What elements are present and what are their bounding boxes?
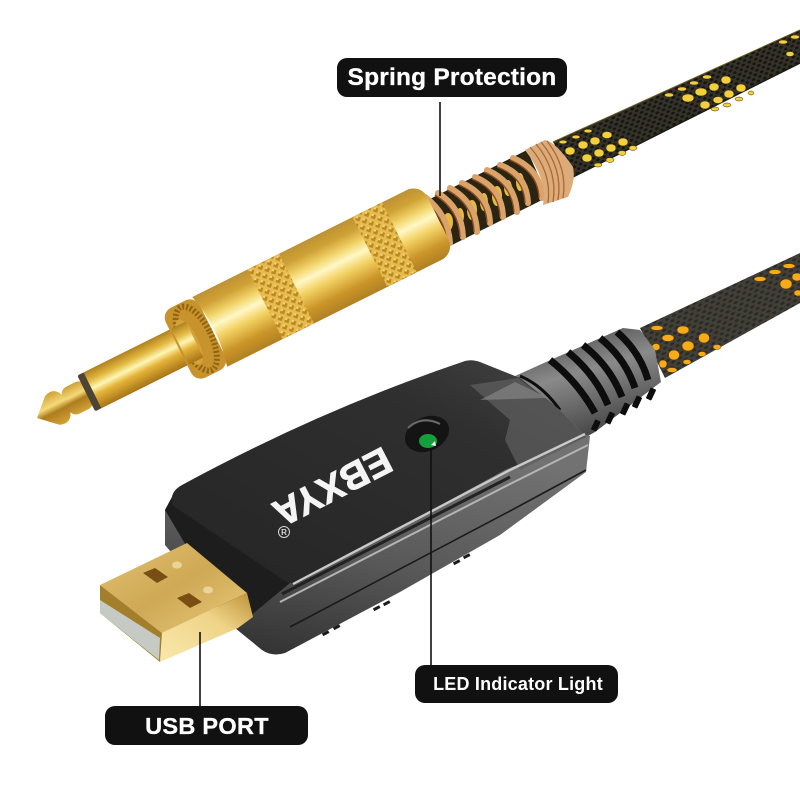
plug opening [100,585,162,662]
callout: LED indicator light [415,450,618,703]
gold jack plug [20,183,455,453]
callout: USB port [105,632,308,745]
knurled bands [248,202,417,339]
callout: spring protection [337,58,567,196]
white insert [100,600,160,660]
plug barrel [192,183,455,367]
spring protection coils [422,140,574,245]
registered mark [278,526,290,538]
callout: spring protection: Spring Protection [348,64,556,91]
registered mark: R [281,528,287,537]
USB connector body [165,360,590,654]
LED indicator [399,409,455,459]
body top face [172,360,586,583]
plug top shell [100,543,247,633]
callout: LED indicator light: LED Indicator Light [433,674,603,694]
lower braided cable [640,253,800,378]
spring end cap [525,140,574,205]
plug side shell [160,593,253,662]
USB metal plug [100,543,253,662]
plug holes [143,568,202,608]
strain relief boot [515,328,661,437]
insulating ring [77,372,102,411]
upper braided cable [553,30,800,177]
body grooves [280,434,588,627]
callout: USB port: USB PORT [145,713,269,739]
plug tip [29,376,97,434]
plug shaft [84,322,202,408]
body side [165,420,590,654]
knurled collar [161,296,230,382]
brand logo: EBXYA [266,438,398,534]
